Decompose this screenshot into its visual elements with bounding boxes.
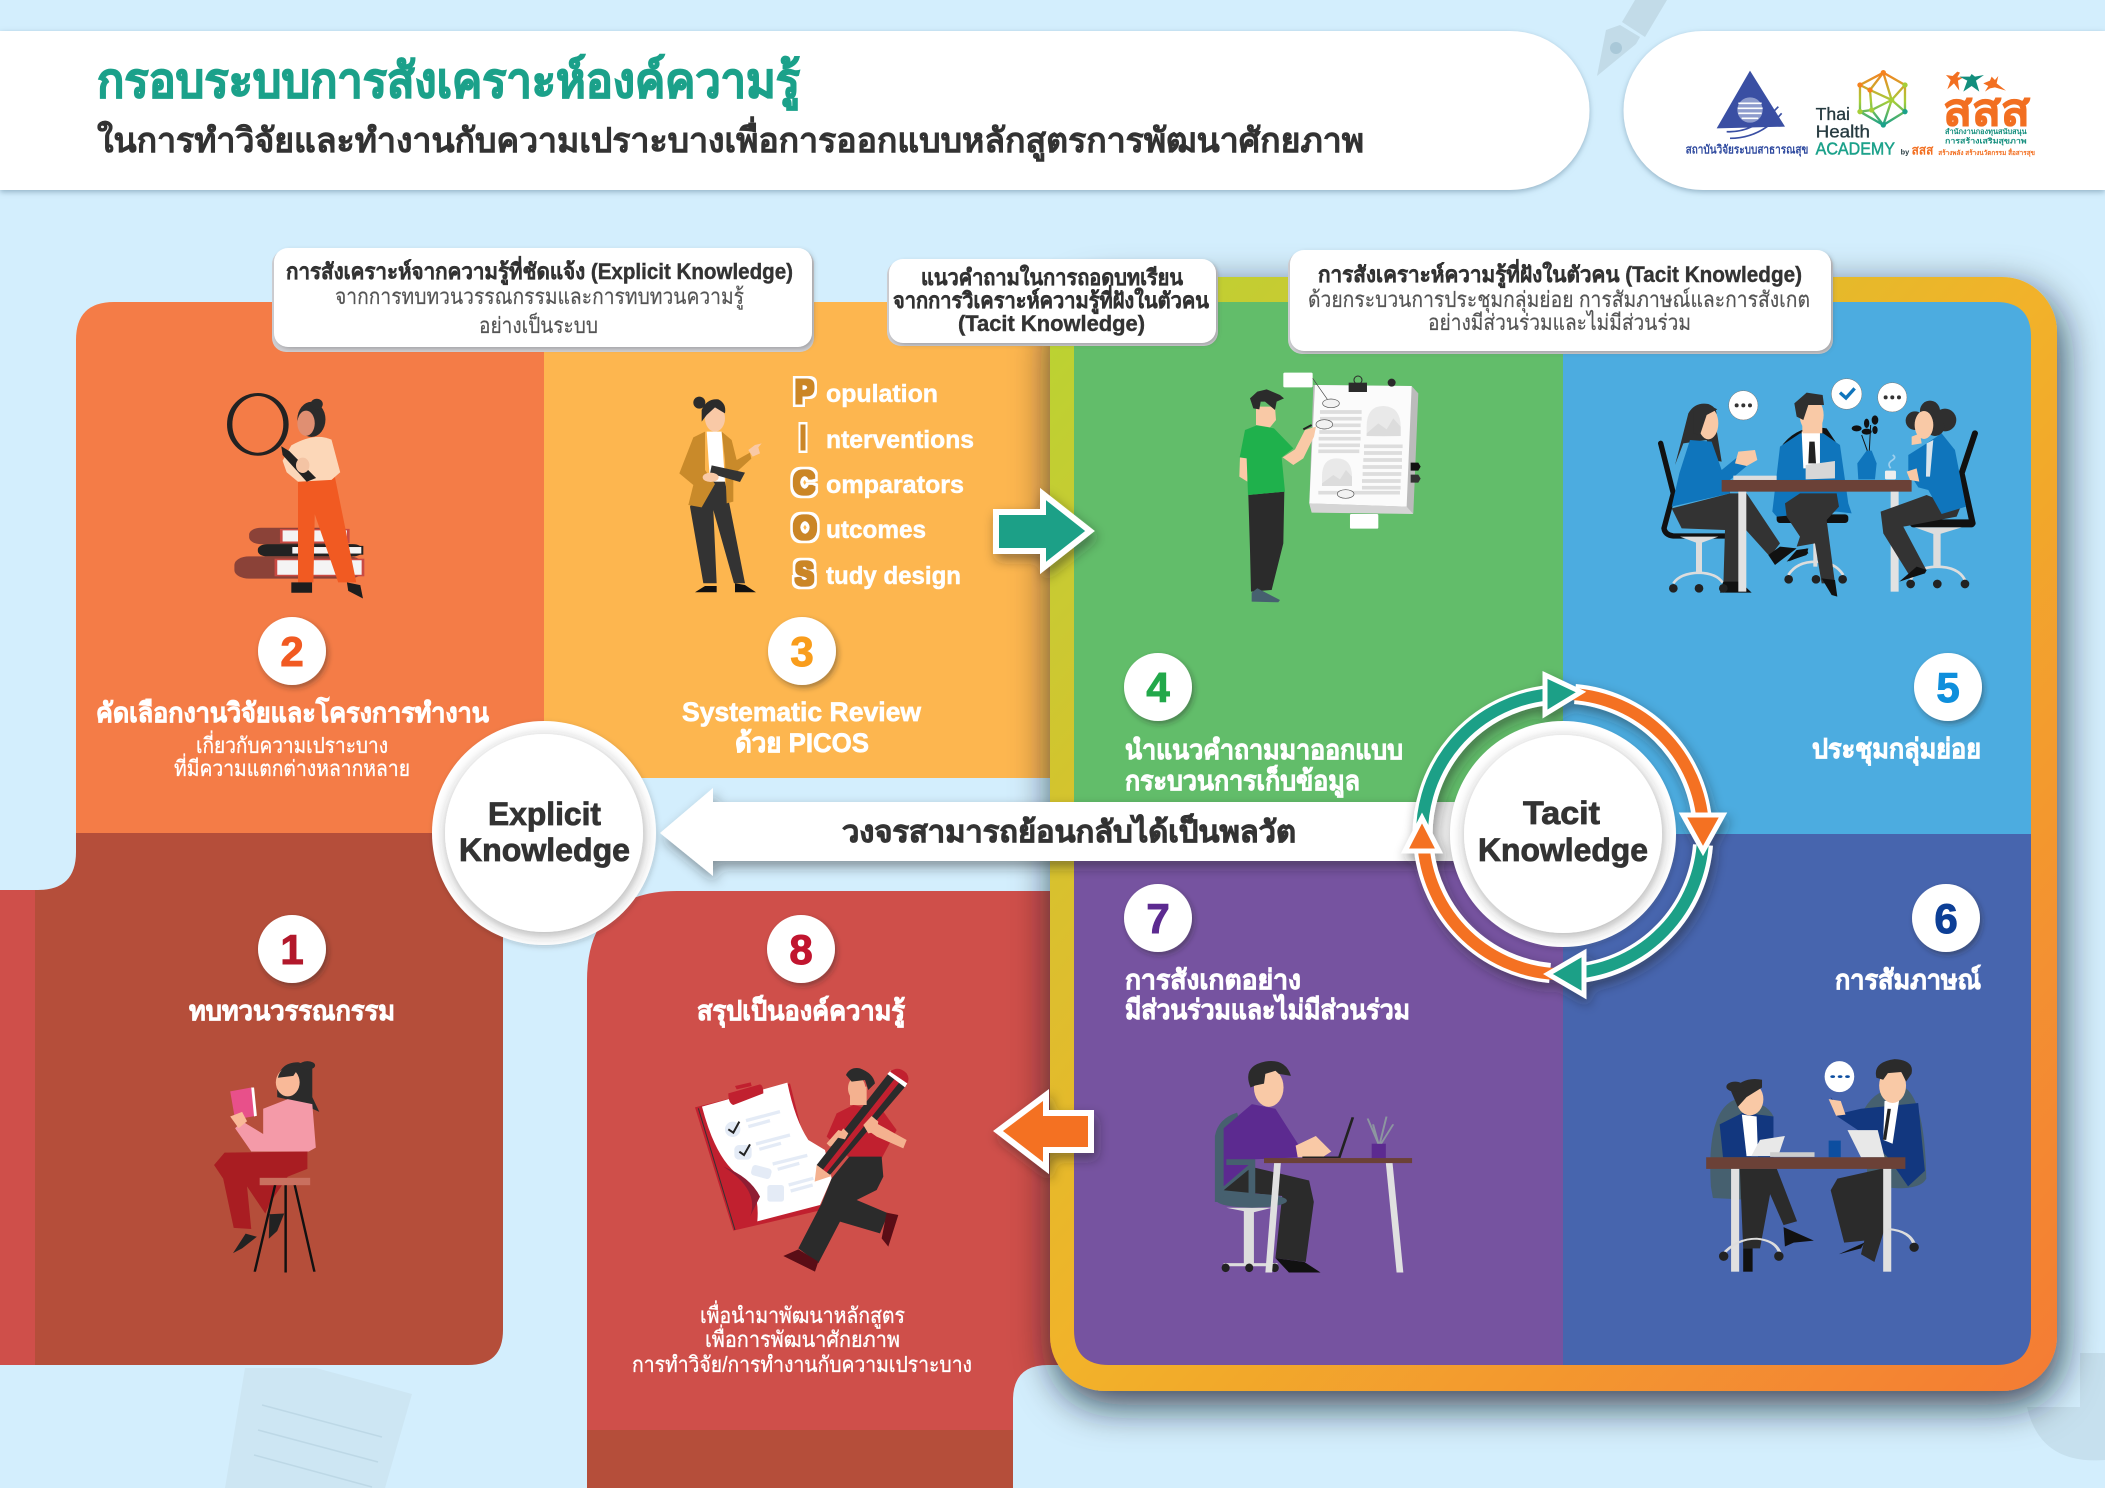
PICOS list: omparators — [826, 471, 964, 499]
panel 8 title: สรุปเป็นองค์ความรู้ — [697, 993, 905, 1028]
circle: explicit knowledge — [432, 721, 656, 945]
callout: lessons learned questions — [887, 259, 1218, 346]
callout: explicit knowledge — [272, 248, 814, 352]
number badge 7 — [1124, 884, 1192, 952]
logo: Thai Health Academy: สสส — [1912, 142, 1934, 157]
PICOS list: opulation — [826, 380, 938, 408]
PICOS list: I — [801, 419, 805, 456]
PICOS list: nterventions — [826, 426, 974, 454]
panel 2 description: เกี่ยวกับความเปราะบาง — [196, 730, 388, 758]
panel 5 title: ประชุมกลุ่มย่อย — [1812, 734, 1981, 766]
PICOS list: C — [793, 464, 815, 501]
PICOS list: P — [795, 373, 814, 410]
icon: man working at laptop — [1215, 1061, 1412, 1272]
circle: explicit knowledge: Knowledge — [459, 832, 630, 868]
PICOS list: tudy design — [826, 562, 961, 590]
arrow: teal step 3 to 4 — [996, 494, 1090, 568]
panel 4 title — [1125, 735, 1403, 798]
panel 8 lower band — [587, 1430, 1013, 1488]
background decoration: pen nib — [1597, 0, 1667, 76]
background decoration: paper — [225, 1368, 412, 1488]
panel 8 description: เพื่อนำมาพัฒนาหลักสูตร — [700, 1300, 905, 1329]
callout: explicit knowledge: จากการทบทวนวรรณกรรมและการทบทวนความรู้ — [335, 284, 744, 310]
circle: explicit knowledge: Explicit — [488, 796, 601, 832]
icon: woman presenting with tablet — [679, 397, 762, 592]
circular arrows — [1405, 675, 1723, 995]
panel 2: screening (base) — [76, 302, 544, 833]
logo: ThaiHealth: สสส — [1943, 86, 2030, 135]
panel 4 title: กระบวนการเก็บข้อมูล — [1125, 763, 1360, 798]
icon: man with giant pencil and checklist — [695, 1068, 908, 1272]
panel 8 description — [632, 1300, 972, 1377]
logo: Thai Health Academy: ACADEMY — [1816, 138, 1895, 158]
panel 4 colour block — [1074, 302, 1563, 834]
icon: two people interview — [1706, 1059, 1926, 1272]
callout: lessons learned questions: แนวคำถามในการถอดบทเรียน — [921, 264, 1183, 290]
callout: tacit knowledge: การสังเคราะห์ความรู้ที่ฝังในตัวคน (Tacit Knowledge) — [1318, 258, 1802, 289]
logo panel — [1624, 31, 2105, 190]
circle: tacit knowledge — [1450, 721, 1676, 947]
number badge 3 — [768, 617, 836, 685]
panel 5 colour block — [1563, 302, 2031, 834]
PICOS list: utcomes — [826, 516, 926, 544]
subtitle: ในการทำวิจัยและทำงานกับความเปราะบางเพื่อการออกแบบหลักสูตรการพัฒนาศักยภาพ — [97, 116, 1364, 162]
logo: Thai Health Academy — [1816, 70, 1934, 158]
PICOS list: S — [795, 555, 814, 592]
callout: tacit knowledge — [1288, 250, 1833, 354]
PICOS list: O — [793, 509, 817, 546]
logo: Thai Health Academy: Thai — [1816, 104, 1850, 124]
icon: woman with magnifier and books — [230, 395, 363, 599]
panel 7 title — [1125, 965, 1410, 1025]
number badge 7: 7 — [1146, 895, 1170, 942]
circle: tacit knowledge: Knowledge — [1478, 832, 1648, 868]
strip left of panel 1 — [0, 890, 36, 1365]
callout: explicit knowledge: อย่างเป็นระบบ — [479, 311, 598, 338]
icon: small group meeting — [1661, 379, 1975, 597]
panel 1: literature review (base) — [35, 833, 503, 1365]
logo: ThaiHealth: การสร้างเสริมสุขภาพ — [1945, 136, 2027, 145]
callout: lessons learned questions: จากการวิเคราะห์ความรู้ที่ฝังในตัวคน — [893, 284, 1209, 315]
title: กรอบระบบการสังเคราะห์องค์ความรู้ — [97, 54, 800, 111]
arrow: dynamic feedback loop: วงจรสามารถย้อนกลับได้เป็นพลวัต — [842, 813, 1296, 849]
icon: man annotating document — [1239, 373, 1421, 602]
number badge 8 — [767, 915, 835, 983]
background decoration: mug — [2027, 1353, 2105, 1460]
callout: tacit knowledge: อย่างมีส่วนร่วมและไม่มีส่วนร่วม — [1428, 310, 1691, 335]
panel 2 description: ที่มีความแตกต่างหลากหลาย — [174, 753, 410, 781]
panel 8 description: การทำวิจัย/การทำงานกับความเปราะบาง — [632, 1352, 972, 1377]
panel 7 title: การสังเกตอย่าง — [1125, 965, 1301, 995]
circle: tacit knowledge: Tacit — [1523, 795, 1600, 831]
number badge 4: 4 — [1146, 664, 1170, 711]
panel 3 title: Systematic Review — [682, 697, 922, 727]
number badge 3: 3 — [790, 628, 814, 675]
panel 6 colour block — [1563, 834, 2031, 1365]
panel 2 description — [174, 730, 410, 781]
number badge 8: 8 — [789, 926, 813, 973]
callout: explicit knowledge: การสังเคราะห์จากความรู้ที่ชัดแจ้ง (Explicit Knowledge) — [286, 255, 793, 286]
panel 4 title: นำแนวคำถามมาออกแบบ — [1125, 735, 1403, 765]
arrow: orange step 7 to 8 — [998, 1095, 1091, 1168]
logo: ThaiHealth: สร้างพลัง สร้างนวัตกรรม สื่อสารสุข — [1938, 147, 2035, 157]
arrow: dynamic feedback loop — [660, 788, 1470, 876]
panel 8: conclusion (base) — [587, 891, 1064, 1488]
callout: lessons learned questions: (Tacit Knowledge) — [958, 311, 1145, 336]
PICOS list — [793, 373, 974, 592]
panel 3: systematic review (base) — [544, 302, 1064, 778]
number badge 2 — [258, 617, 326, 685]
panel 6 title: การสัมภาษณ์ — [1835, 964, 1981, 995]
panel 7 title: มีส่วนร่วมและไม่มีส่วนร่วม — [1125, 994, 1410, 1025]
logo: Thai Health Academy: by — [1901, 147, 1910, 156]
number badge 6 — [1912, 884, 1980, 952]
number badge 6: 6 — [1934, 895, 1958, 942]
panel 8 description: เพื่อการพัฒนาศักยภาพ — [705, 1324, 900, 1352]
number badge 5 — [1914, 653, 1982, 721]
frame: tacit knowledge quadrant — [1050, 277, 2057, 1391]
panel 1 title: ทบทวนวรรณกรรม — [189, 996, 395, 1026]
panel 3 title: ด้วย PICOS — [735, 728, 869, 758]
callout: tacit knowledge: ด้วยกระบวนการประชุมกลุ่มย่อย การสัมภาษณ์และการสังเกต — [1308, 287, 1810, 313]
panel 2 title: คัดเลือกงานวิจัยและโครงการทำงาน — [96, 696, 489, 728]
number badge 2: 2 — [280, 628, 304, 675]
icon: woman reading on stool — [214, 1061, 319, 1272]
number badge 4 — [1124, 653, 1192, 721]
logo: ThaiHealth: สำนักงานกองทุนสนับสนุน — [1945, 127, 2027, 136]
logo: Thai Health Academy: Health — [1816, 121, 1870, 141]
logo: ThaiHealth — [1938, 72, 2035, 157]
logo: HSRI: สถาบันวิจัยระบบสาธารณสุข — [1686, 142, 1808, 157]
panel 7 colour block — [1074, 834, 1563, 1365]
header panel — [0, 31, 1590, 190]
number badge 1: 1 — [280, 926, 304, 973]
number badge 1 — [258, 915, 326, 983]
number badge 5: 5 — [1936, 664, 1960, 711]
panel 3 title — [682, 697, 922, 758]
logo: HSRI — [1686, 71, 1808, 157]
